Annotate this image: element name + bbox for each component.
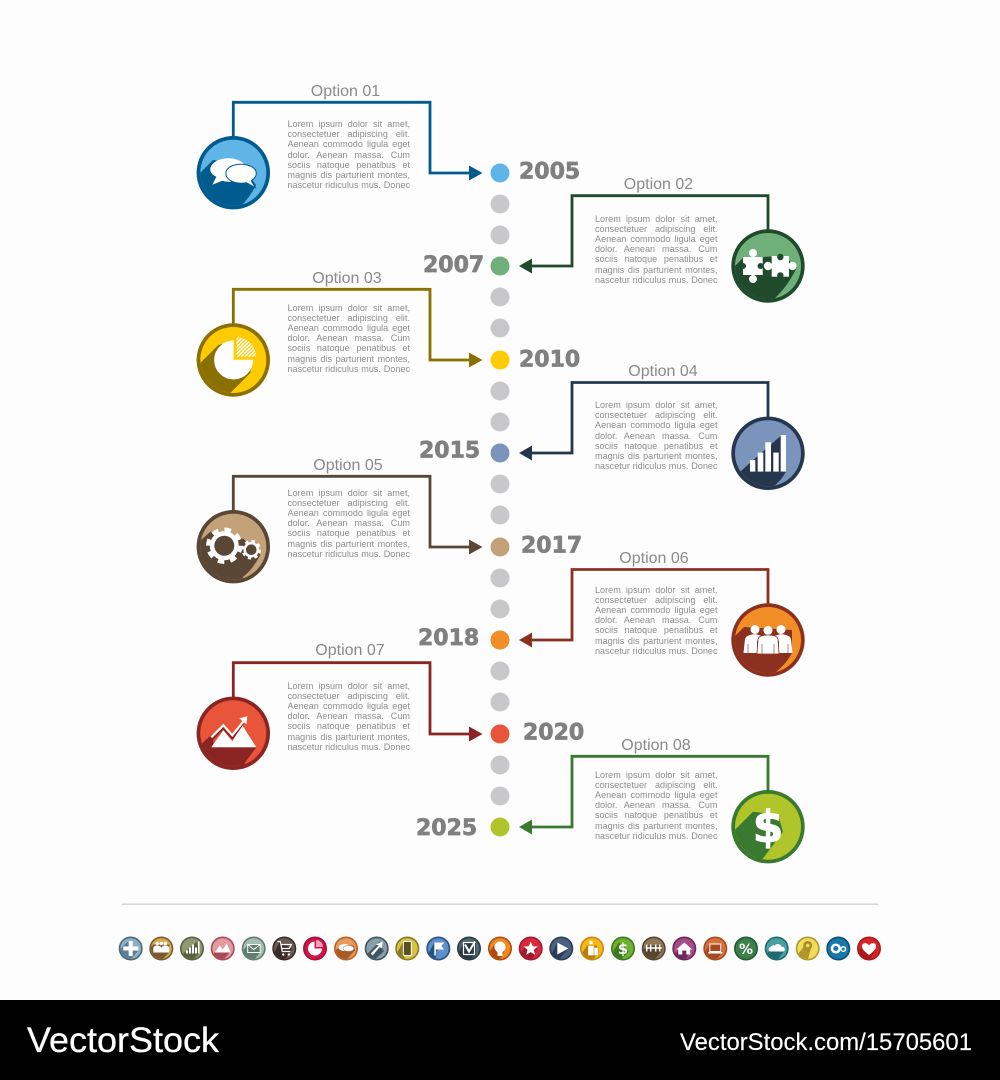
text block 06: dolor. Aenean massa. Cum	[595, 615, 718, 625]
text block 02: Aenean commodo ligula eget	[595, 234, 718, 244]
text block 03: Aenean commodo ligula eget	[288, 323, 410, 333]
small icon: bars	[180, 936, 204, 960]
text block 05: nascetur ridiculus mus. Donec	[288, 549, 410, 559]
connector arrow 08	[519, 756, 768, 834]
heading: option 07: Option 07	[315, 642, 385, 659]
timeline dot 2020	[490, 724, 510, 744]
text block 07	[288, 680, 412, 756]
text block 08: nascetur ridiculus mus. Donec	[595, 831, 718, 841]
text block 05: sociis natoque penatibus et	[288, 528, 410, 538]
panel: option 06	[419, 552, 805, 677]
small icon: gears	[826, 936, 850, 960]
small icon: map pin	[796, 936, 820, 960]
timeline dot 2025	[490, 818, 510, 836]
timeline dot 2015	[490, 444, 510, 462]
year 2007: 2007	[423, 253, 484, 278]
text block 05: magnis dis parturient montes,	[288, 539, 410, 549]
text block 04: dolor. Aenean massa. Cum	[595, 431, 718, 441]
timeline dot 2018	[490, 630, 510, 650]
text block 02: Lorem ipsum dolor sit amet,	[595, 214, 718, 224]
small icon: star	[519, 936, 543, 960]
text block 02: consectetuer adipiscing elit.	[595, 224, 718, 234]
icon: people	[731, 603, 805, 677]
heading: option 05: Option 05	[313, 457, 383, 474]
text block 08: magnis dis parturient montes,	[595, 821, 718, 831]
text block 07: Lorem ipsum dolor sit amet,	[288, 680, 410, 690]
text block 01: sociis natoque penatibus et	[288, 160, 410, 170]
text block 03: Lorem ipsum dolor sit amet,	[288, 302, 410, 312]
small icon: home	[672, 936, 696, 960]
text block 06: Aenean commodo ligula eget	[595, 605, 718, 615]
icon row	[119, 936, 881, 962]
text block 04: consectetuer adipiscing elit.	[595, 410, 718, 420]
heading: option 08: Option 08	[621, 737, 691, 754]
icon: growth mountain	[196, 696, 270, 770]
text block 02	[595, 214, 719, 288]
text block 03	[288, 302, 412, 378]
connector arrow 07	[233, 663, 482, 742]
text block 08: sociis natoque penatibus et	[595, 810, 718, 820]
year 2010: 2010	[519, 348, 580, 372]
text block 01: Lorem ipsum dolor sit amet,	[288, 119, 410, 129]
icon: bar chart	[731, 416, 805, 490]
text block 07: Aenean commodo ligula eget	[288, 701, 410, 711]
small icon: arrow	[365, 936, 389, 960]
icon: dollar sign	[731, 790, 805, 864]
icon: dollar sign: $	[753, 802, 783, 853]
small icon: percent: %	[739, 942, 753, 958]
text block 07: sociis natoque penatibus et	[288, 721, 410, 731]
timeline dot 2017	[490, 538, 510, 556]
text block 02: sociis natoque penatibus et	[595, 254, 718, 264]
small icon: check	[457, 936, 481, 960]
text block 06: consectetuer adipiscing elit.	[595, 595, 718, 605]
text block 06: Lorem ipsum dolor sit amet,	[595, 584, 718, 594]
panel: option 03	[196, 272, 580, 397]
text block 07: dolor. Aenean massa. Cum	[288, 711, 410, 721]
small icon: bulb	[488, 936, 512, 960]
timeline dot 2007	[490, 256, 510, 276]
timeline dots	[490, 194, 510, 806]
year 2020: 2020	[523, 720, 584, 746]
text block 04: Aenean commodo ligula eget	[595, 420, 718, 430]
small icon: play	[549, 936, 573, 960]
text block 04: sociis natoque penatibus et	[595, 441, 718, 451]
text block 06: nascetur ridiculus mus. Donec	[595, 646, 718, 656]
text block 08: Aenean commodo ligula eget	[595, 790, 718, 800]
text block 04	[595, 400, 719, 475]
heading: option 04: Option 04	[628, 363, 698, 380]
timeline dot 2010	[490, 350, 510, 370]
divider line	[122, 904, 878, 905]
heading: option 03: Option 03	[312, 270, 382, 287]
text block 08	[595, 770, 719, 844]
icon: speech bubbles	[196, 136, 270, 210]
panel: option 08	[417, 738, 805, 864]
connector arrow 01	[233, 102, 482, 180]
footer band	[0, 1000, 1000, 1080]
panel: option 02	[424, 178, 805, 303]
text block 03: nascetur ridiculus mus. Donec	[288, 364, 410, 374]
text block 07: consectetuer adipiscing elit.	[288, 691, 410, 701]
small icon: person	[580, 936, 604, 960]
footer logo: VectorStock	[27, 1021, 220, 1060]
footer image reference: VectorStock.com/15705601	[680, 1029, 972, 1056]
panel: option 07	[196, 644, 584, 770]
small icon: people	[149, 936, 173, 960]
text block 07: nascetur ridiculus mus. Donec	[288, 742, 410, 752]
year 2015: 2015	[419, 438, 480, 464]
small icon: percent	[734, 936, 758, 960]
small icon: cloud	[765, 936, 789, 960]
text block 02: magnis dis parturient montes,	[595, 265, 718, 275]
connector arrow 03	[233, 289, 482, 368]
panel: option 05	[196, 458, 581, 584]
text block 05: Aenean commodo ligula eget	[288, 508, 410, 518]
text block 05	[288, 488, 412, 562]
text block 03: consectetuer adipiscing elit.	[288, 313, 410, 323]
small icon: chat	[334, 936, 358, 960]
small icon: mail	[242, 936, 266, 960]
panel: option 04	[420, 364, 805, 490]
small icon: dollar	[611, 936, 635, 960]
small icon: phone	[395, 936, 419, 960]
text block 08: dolor. Aenean massa. Cum	[595, 800, 718, 810]
text block 05: consectetuer adipiscing elit.	[288, 498, 410, 508]
text block 06: sociis natoque penatibus et	[595, 625, 718, 635]
icon: puzzle pieces	[731, 229, 805, 303]
text block 03: dolor. Aenean massa. Cum	[288, 333, 410, 343]
text block 06: magnis dis parturient montes,	[595, 636, 718, 646]
connector arrow 04	[519, 382, 768, 460]
small icon: flag	[426, 936, 450, 960]
text block 03: sociis natoque penatibus et	[288, 343, 410, 353]
text block 01: magnis dis parturient montes,	[288, 170, 410, 180]
year 2005: 2005	[519, 160, 580, 184]
connector arrow 05	[233, 476, 482, 554]
text block 01	[288, 119, 412, 194]
icon: gears	[196, 510, 270, 584]
text block 01: nascetur ridiculus mus. Donec	[288, 180, 410, 190]
text block 02: dolor. Aenean massa. Cum	[595, 244, 718, 254]
small icon: dollar: $	[618, 940, 628, 958]
year 2018: 2018	[418, 626, 479, 651]
small icon: laptop	[703, 936, 727, 960]
heading: option 06: Option 06	[619, 550, 689, 567]
text block 01: Aenean commodo ligula eget	[288, 139, 410, 149]
small icon: puzzle	[642, 936, 666, 960]
text block 03: magnis dis parturient montes,	[288, 354, 410, 364]
text block 04: nascetur ridiculus mus. Donec	[595, 461, 718, 471]
small icon: mountain	[211, 936, 235, 960]
text block 08: consectetuer adipiscing elit.	[595, 780, 718, 790]
text block 01: consectetuer adipiscing elit.	[288, 129, 410, 139]
heading: option 01: Option 01	[311, 83, 380, 100]
panel: option 01	[196, 84, 579, 210]
text block 01: dolor. Aenean massa. Cum	[288, 150, 410, 160]
text block 05: dolor. Aenean massa. Cum	[288, 518, 410, 528]
year 2025: 2025	[416, 816, 477, 841]
text block 04: magnis dis parturient montes,	[595, 451, 718, 461]
connector arrow 06	[519, 570, 768, 648]
small icon: pie	[303, 936, 327, 960]
text block 05: Lorem ipsum dolor sit amet,	[288, 488, 410, 498]
text block 04: Lorem ipsum dolor sit amet,	[595, 400, 718, 410]
timeline dot 2005	[490, 164, 510, 182]
icon: pie chart	[196, 323, 270, 397]
text block 08: Lorem ipsum dolor sit amet,	[595, 770, 718, 780]
year 2017: 2017	[521, 534, 582, 558]
small icon: heart	[857, 936, 881, 960]
text block 02: nascetur ridiculus mus. Donec	[595, 275, 718, 285]
connector arrow 02	[519, 196, 768, 274]
text block 07: magnis dis parturient montes,	[288, 732, 410, 742]
text block 06	[595, 584, 719, 660]
small icon: plus	[119, 936, 143, 962]
small icon: cart	[272, 936, 296, 960]
heading: option 02: Option 02	[624, 176, 693, 193]
